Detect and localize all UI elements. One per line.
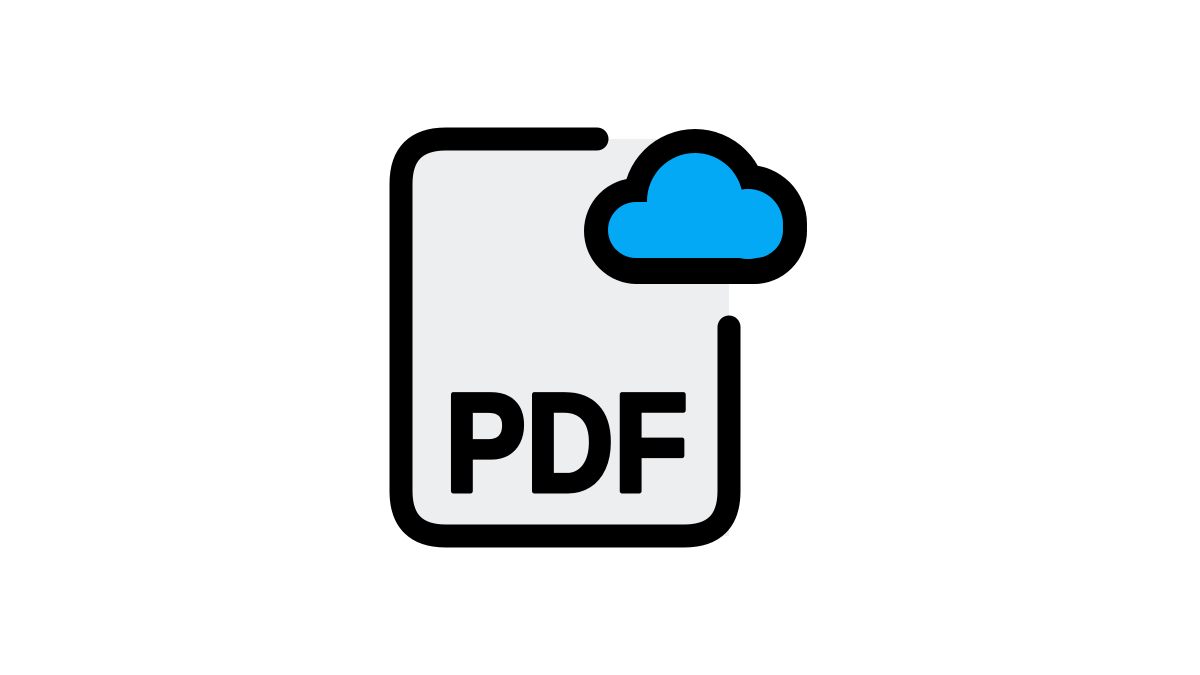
icon: cloud (584, 129, 807, 284)
document outline (401, 139, 729, 536)
label: PDF: PDF (445, 364, 688, 521)
document page fill (401, 139, 729, 536)
